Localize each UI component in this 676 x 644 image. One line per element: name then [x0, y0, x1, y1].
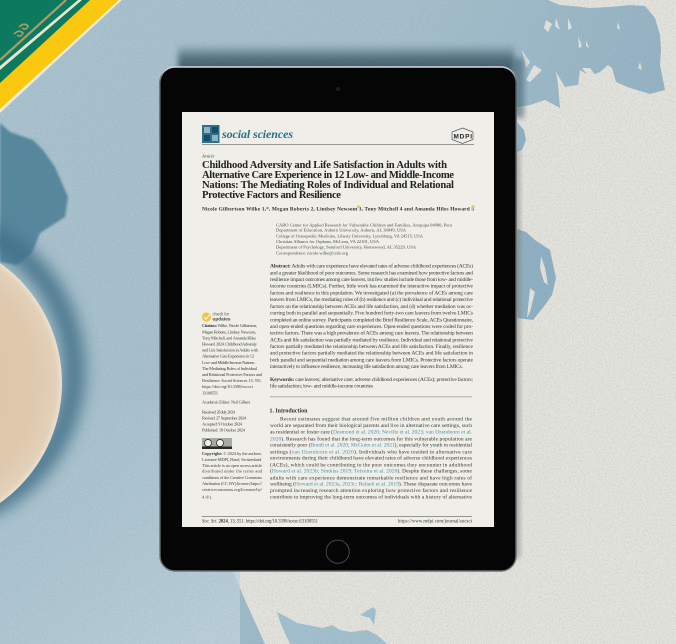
- journal name: social sciences: [221, 127, 293, 141]
- introduction text: wellbeing (Howard et al. 2023a, 2023c; Refaeli et al. 2019). These disparate outcomes have: [270, 481, 473, 488]
- copyright: distributed under the terms and: [202, 469, 263, 474]
- introduction text: environments during their childhood have elevated rates of adverse childhood experiences: [270, 455, 472, 462]
- authors: Nicole Gilbertson Wilke 1,*, Megan Roberts 2, Lindsey Newsom 3, Tony Mitchell 4 and Amanda Hiles Howard 5: [202, 206, 474, 212]
- screen: [182, 112, 494, 527]
- copyright: [202, 451, 263, 499]
- affiliations: Department of Education, Auburn University, Auburn, AL 36849, USA: [276, 228, 407, 234]
- tablet shadow: [178, 44, 524, 558]
- affiliations: Department of Psychology, Samford University, Homewood, AL 35229, USA: [276, 245, 417, 251]
- copyright: Attribution (CC BY) license (https://: [202, 481, 263, 486]
- abstract: factors partially mediated the relationship between ACEs and life satisfaction. Finally, resilience: [270, 343, 474, 350]
- abstract: [270, 263, 474, 370]
- introduction text: adults with care experience demonstrate remarkable resilience and have high rates of: [270, 474, 472, 481]
- citation: https://doi.org/10.3390/socsci: [202, 384, 254, 389]
- abstract: and protective factors partially mediated the relationship between ACEs and life satisfaction in: [270, 350, 473, 357]
- tablet: [160, 67, 516, 571]
- check for updates badge: check for: [212, 312, 230, 317]
- introduction text: Recent estimates suggest that around five million children and youth around the: [280, 416, 473, 423]
- publication dates: [202, 410, 247, 433]
- footer rule: [202, 515, 472, 518]
- MDPI logo: [452, 128, 473, 144]
- introduction text: 2020). Research has found that the long-term outcomes for this vulnerable population are: [270, 435, 473, 442]
- abstract: factors on the relationship between ACEs and life satisfaction, and (d) whether mediation was oc-: [270, 303, 473, 310]
- citation: The Mediating Roles of Individual: [202, 366, 258, 371]
- citation: Megan Roberts, Lindsey Newsom,: [202, 329, 256, 335]
- citation: [202, 323, 263, 395]
- publication dates: Received: 26 July 2024: [202, 410, 236, 415]
- abstract: curring both in parallel and sequentially. Five hundred forty-two care leavers from twelve LMICs: [270, 310, 473, 317]
- abstract: and open-ended questions regarding care experiences. Open-ended questions were coded for pro-: [270, 323, 473, 330]
- article title: Alternative Care Experience in 12 Low- and Middle-Income: [202, 170, 454, 181]
- copyright: 4.0/).: [202, 494, 212, 499]
- cup rim: [0, 236, 62, 530]
- abstract: tective factors. There was a high prevalence of ACEs among care leavers. The relationship between: [270, 330, 473, 337]
- affiliations: CARO Center for Applied Research for Vulnerable Children and Families, Arequipa 04000, Peru: [276, 222, 453, 228]
- check for updates badge: [202, 312, 231, 322]
- camera: [336, 87, 340, 91]
- publication dates: Accepted: 9 October 2024: [202, 422, 243, 427]
- abstract: and a greater likelihood of poor outcomes. Some research has examined how protective factors and: [270, 269, 473, 276]
- home button: [326, 540, 349, 563]
- article title: [202, 160, 454, 201]
- publication dates: Revised: 27 September 2024: [202, 416, 247, 421]
- publication dates: Published: 18 October 2024: [202, 428, 246, 433]
- footer citation: Soc. Sci. 2024, 13, 551. https://doi.org/10.3390/socsci13100551: [202, 520, 319, 525]
- abstract: ACEs and life satisfaction was partially mediated by resilience. Individual and relational protective: [270, 336, 474, 343]
- academic editor: Academic Editor: Neil Gilbert: [202, 399, 251, 404]
- keywords: Keywords: care leavers; alternative care; adverse childhood experiences (ACEs); protective factors;: [270, 376, 473, 383]
- article title: Childhood Adversity and Life Satisfaction in Adults with: [202, 160, 447, 171]
- introduction text: contribute to improving the long-term outcomes of individuals with a history of alternative: [270, 494, 473, 501]
- introduction text: as residential or foster care (Desmond et al. 2020; Neville et al. 2023; van IJzendoorn et al.: [270, 429, 473, 436]
- citation: Tony Mitchell, and Amanda Hiles: [202, 335, 256, 341]
- introduction text: settings (van IJzendoorn et al. 2020). Individuals who have resided in alternative care: [270, 448, 473, 455]
- article title: Protective Factors and Resilience: [202, 190, 341, 201]
- citation: Resilience. Social Sciences 13: 551.: [202, 378, 262, 383]
- abstract: both parallel and sequential mediation among care leavers from LMICs. Protective factors operate: [270, 356, 474, 363]
- abstract: resilience impact outcomes among care leavers, but few studies include those from low- and middle-: [270, 276, 473, 283]
- abstract: income countries (LMICs). Further, little work has examined the interactive impact of protective: [270, 283, 474, 290]
- citation: Citation: Wilke, Nicole Gilbertson,: [202, 323, 257, 329]
- citation: Low- and Middle-Income Nations:: [202, 360, 255, 365]
- check for updates badge: updates: [212, 316, 231, 321]
- MDPI logo: MDPI: [454, 133, 472, 140]
- introduction text: prompted increasing research attention exploring how protective factors and resilience: [270, 487, 473, 494]
- introduction text: world are separated from their biological parents and live in alternative care settings, such: [270, 422, 472, 429]
- journal logo: [202, 125, 220, 143]
- affiliations: [276, 222, 453, 255]
- decorative book corner: [0, 0, 122, 113]
- copyright: Licensee MDPI, Basel, Switzerland.: [202, 457, 262, 463]
- abstract: completed an online survey. Participants completed the Brief Resilience Scale, ACEs Questionnaire,: [270, 316, 474, 323]
- article type: Article: [201, 154, 215, 158]
- abstract: interactively to influence resilience, increasing life satisfaction among care leavers from LMICs.: [270, 363, 464, 370]
- citation: and Relational Protective Factors and: [202, 372, 263, 377]
- copyright: creativecommons.org/licenses/by/: [202, 487, 263, 492]
- article title: Nations: The Mediating Roles of Individual and Relational: [202, 180, 454, 191]
- affiliations: Correspondence: nicole.wilke@cnlo.org: [276, 250, 349, 255]
- copyright: Copyright: © 2024 by the authors.: [202, 451, 262, 456]
- introduction text: (ACEs), which could be contributing to the poor outcomes they encounter in adulthood: [270, 461, 472, 468]
- keywords: life satisfaction; low- and middle-income countries: [270, 383, 373, 390]
- keywords: [270, 376, 473, 390]
- citation: 13100551: [202, 390, 218, 395]
- ORCID badges: [357, 205, 475, 209]
- book ornament: [14, 24, 28, 36]
- citation: Alternative Care Experience in 12: [202, 354, 254, 359]
- creative commons badge: [202, 438, 232, 449]
- citation: Howard. 2024. Childhood Adversity: [202, 342, 258, 346]
- copyright: conditions of the Creative Commons: [202, 475, 262, 480]
- abstract: Abstract: Adults with care experience have elevated rates of adverse childhood experiences (ACEs): [270, 263, 473, 270]
- background: dark water stain: [0, 123, 68, 265]
- introduction text: [270, 416, 473, 501]
- abstract rule: [270, 396, 472, 398]
- cup shadow: [0, 220, 74, 520]
- introduction text: (Howard et al. 2023b; Simkiss 2019; Teixeira et al. 2020). Despite these challenges, some: [270, 468, 473, 475]
- section heading: introduction: 1. Introduction: [270, 409, 308, 415]
- citation: and Life Satisfaction in Adults with: [202, 348, 259, 353]
- footer url: https://www.mdpi.com/journal/socsci: [398, 520, 473, 525]
- affiliations: Christian Alliance for Orphans, McLean, VA 22101, USA: [276, 239, 380, 245]
- tablet body: [160, 67, 516, 571]
- copyright: This article is an open access article: [202, 463, 262, 468]
- abstract: leavers from LMICs, the mediating roles of (b) resilience and (c) individual and relational protective: [270, 296, 474, 303]
- introduction text: consistently poor (Bondi et al. 2020; McGuire et al. 2021), especially for youth in residential: [270, 442, 472, 449]
- abstract: factors and resilience in this population. We investigated (a) the prevalence of ACEs among care: [270, 289, 474, 296]
- affiliations: College of Osteopathic Medicine, Liberty University, Lynchburg, VA 24515, USA: [276, 233, 424, 239]
- header rule: [202, 143, 474, 146]
